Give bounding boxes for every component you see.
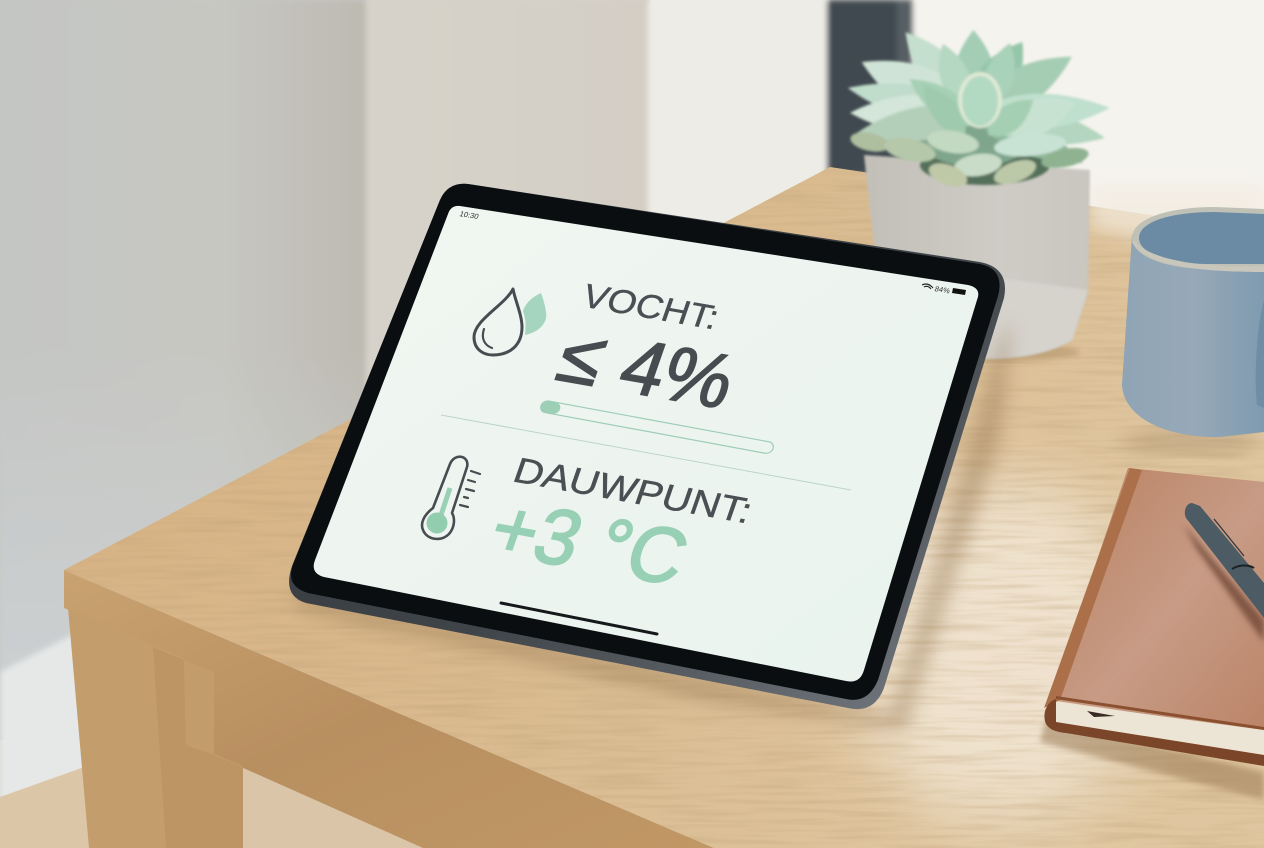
light reflection on table <box>850 480 1150 820</box>
coffee mug <box>1120 207 1264 454</box>
tablet <box>289 184 1005 709</box>
table leg <box>68 608 243 848</box>
status: time: 10:30 <box>458 209 480 221</box>
plant pot <box>864 155 1090 362</box>
value: plus 3 degrees celsius: +3 °C <box>479 484 699 602</box>
table apron and edge <box>64 570 714 848</box>
wood grain <box>188 185 1253 848</box>
progress bar <box>539 400 775 454</box>
tablet screen <box>314 206 978 682</box>
tablet shadow <box>290 320 1012 730</box>
notebook cover <box>1050 468 1264 732</box>
status: wifi and battery: 84% <box>933 284 952 295</box>
notebook pages <box>1056 702 1264 755</box>
value: max 4 percent: ≤ 4% <box>547 312 746 425</box>
pen <box>1184 503 1264 642</box>
icon: thermometer <box>422 457 480 539</box>
divider <box>441 415 851 490</box>
table <box>64 167 1264 848</box>
heading: dauwpunt: DAUWPUNT: <box>508 450 758 531</box>
notebook <box>1040 468 1264 800</box>
table top <box>64 167 1264 848</box>
heading: vocht: VOCHT: <box>577 278 724 337</box>
icon: water drop with leaf <box>474 289 546 355</box>
tablet body <box>289 184 1005 709</box>
floor behind table <box>0 760 440 848</box>
succulent plant <box>844 20 1111 191</box>
home indicator <box>501 603 657 634</box>
tablet bezel <box>291 184 1000 700</box>
status: wifi and battery <box>922 284 966 295</box>
window glow on the table edge <box>1090 185 1264 262</box>
notebook spine and back cover <box>1044 699 1264 766</box>
